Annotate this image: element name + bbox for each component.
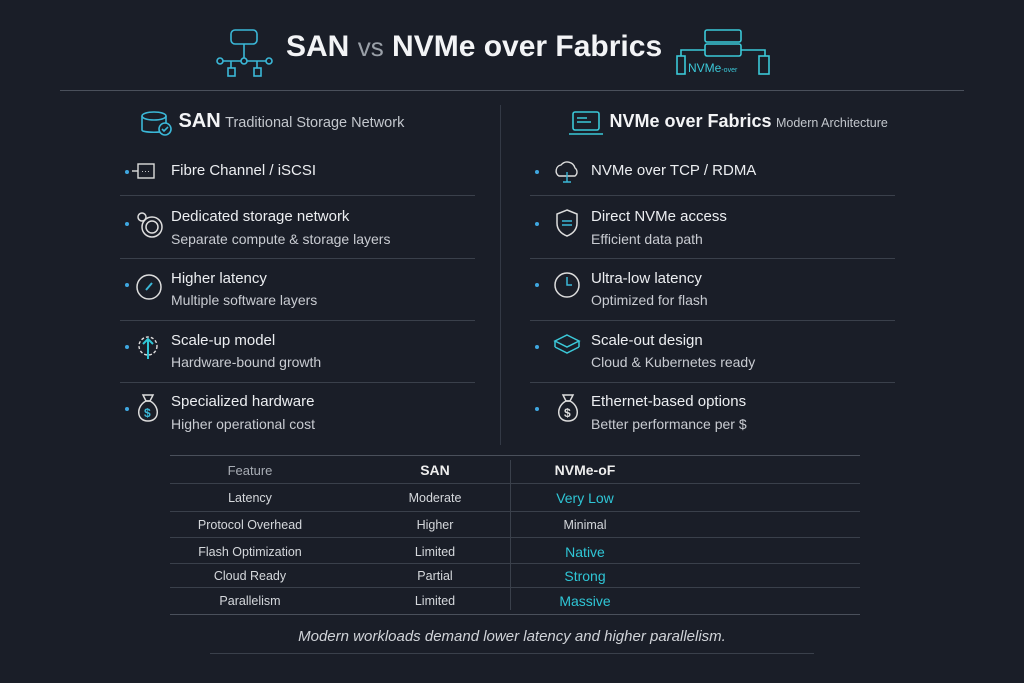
comparison table: Minimal [563, 518, 607, 532]
comparison table: Higher [417, 518, 453, 532]
comparison table: NVMe-oF [555, 462, 615, 478]
panel: SAN list [120, 162, 475, 432]
left header: SAN Traditional Storage Network [178, 110, 404, 132]
panel: NVMe-oF list: Cloud & Kubernetes ready [591, 354, 755, 370]
panel: NVMe-oF list: Optimized for flash [591, 292, 708, 308]
comparison table: Very Low [556, 490, 614, 506]
panel: SAN list: Hardware-bound growth [171, 354, 321, 370]
panel: SAN list: Specialized hardware [171, 393, 314, 410]
panel: NVMe-oF list: Scale-out design [591, 332, 703, 349]
comparison table: Massive [559, 593, 611, 609]
panel: NVMe-oF list: NVMe over TCP / RDMA [591, 162, 756, 179]
comparison table [170, 455, 860, 615]
panel: NVMe-oF list: Ultra-low latency [591, 270, 702, 287]
panel: SAN list: Scale-up model [171, 332, 275, 349]
comparison table: Cloud Ready [214, 569, 286, 583]
panel: NVMe-oF list [530, 161, 895, 432]
comparison table: Flash Optimization [198, 545, 302, 559]
panel: NVMe-oF list: Ethernet-based options [591, 393, 746, 410]
panel: NVMe-oF list: Efficient data path [591, 231, 703, 247]
panel: SAN list: Higher latency [171, 270, 267, 287]
icon: SAN network [216, 29, 273, 77]
comparison table: Feature [228, 463, 272, 478]
panel: SAN list: $ [144, 406, 151, 420]
caption: Modern workloads demand lower latency and higher parallelism. [298, 628, 726, 645]
comparison table: SAN [420, 462, 450, 478]
panel: SAN list: ··· [141, 166, 150, 176]
comparison table: Partial [417, 569, 453, 583]
comparison table: Limited [415, 594, 455, 608]
comparison table: Native [565, 544, 605, 560]
panel: NVMe-oF list: Direct NVMe access [591, 208, 727, 225]
panel: SAN list: Fibre Channel / iSCSI [171, 162, 316, 179]
comparison table: Parallelism [219, 594, 281, 608]
comparison table: Latency [228, 491, 272, 505]
panel: SAN list: Multiple software layers [171, 292, 317, 308]
comparison table: Moderate [409, 491, 461, 505]
panel: NVMe-oF list: $ [564, 406, 571, 420]
panel: SAN list: Separate compute & storage layers [171, 231, 390, 247]
right header: NVMe over Fabrics Modern Architecture [609, 111, 888, 131]
icon: NVMe server: NVMe-over [688, 61, 738, 75]
title: SAN vs NVMe over Fabrics [286, 30, 662, 63]
comparison table: Protocol Overhead [198, 518, 302, 532]
comparison table: Strong [564, 568, 606, 584]
panel: NVMe-oF list: Better performance per $ [591, 416, 747, 432]
panel: SAN list: Dedicated storage network [171, 208, 349, 225]
panel: SAN list: Higher operational cost [171, 416, 315, 432]
icon: NVMe server [676, 29, 770, 75]
comparison table: Limited [415, 545, 455, 559]
